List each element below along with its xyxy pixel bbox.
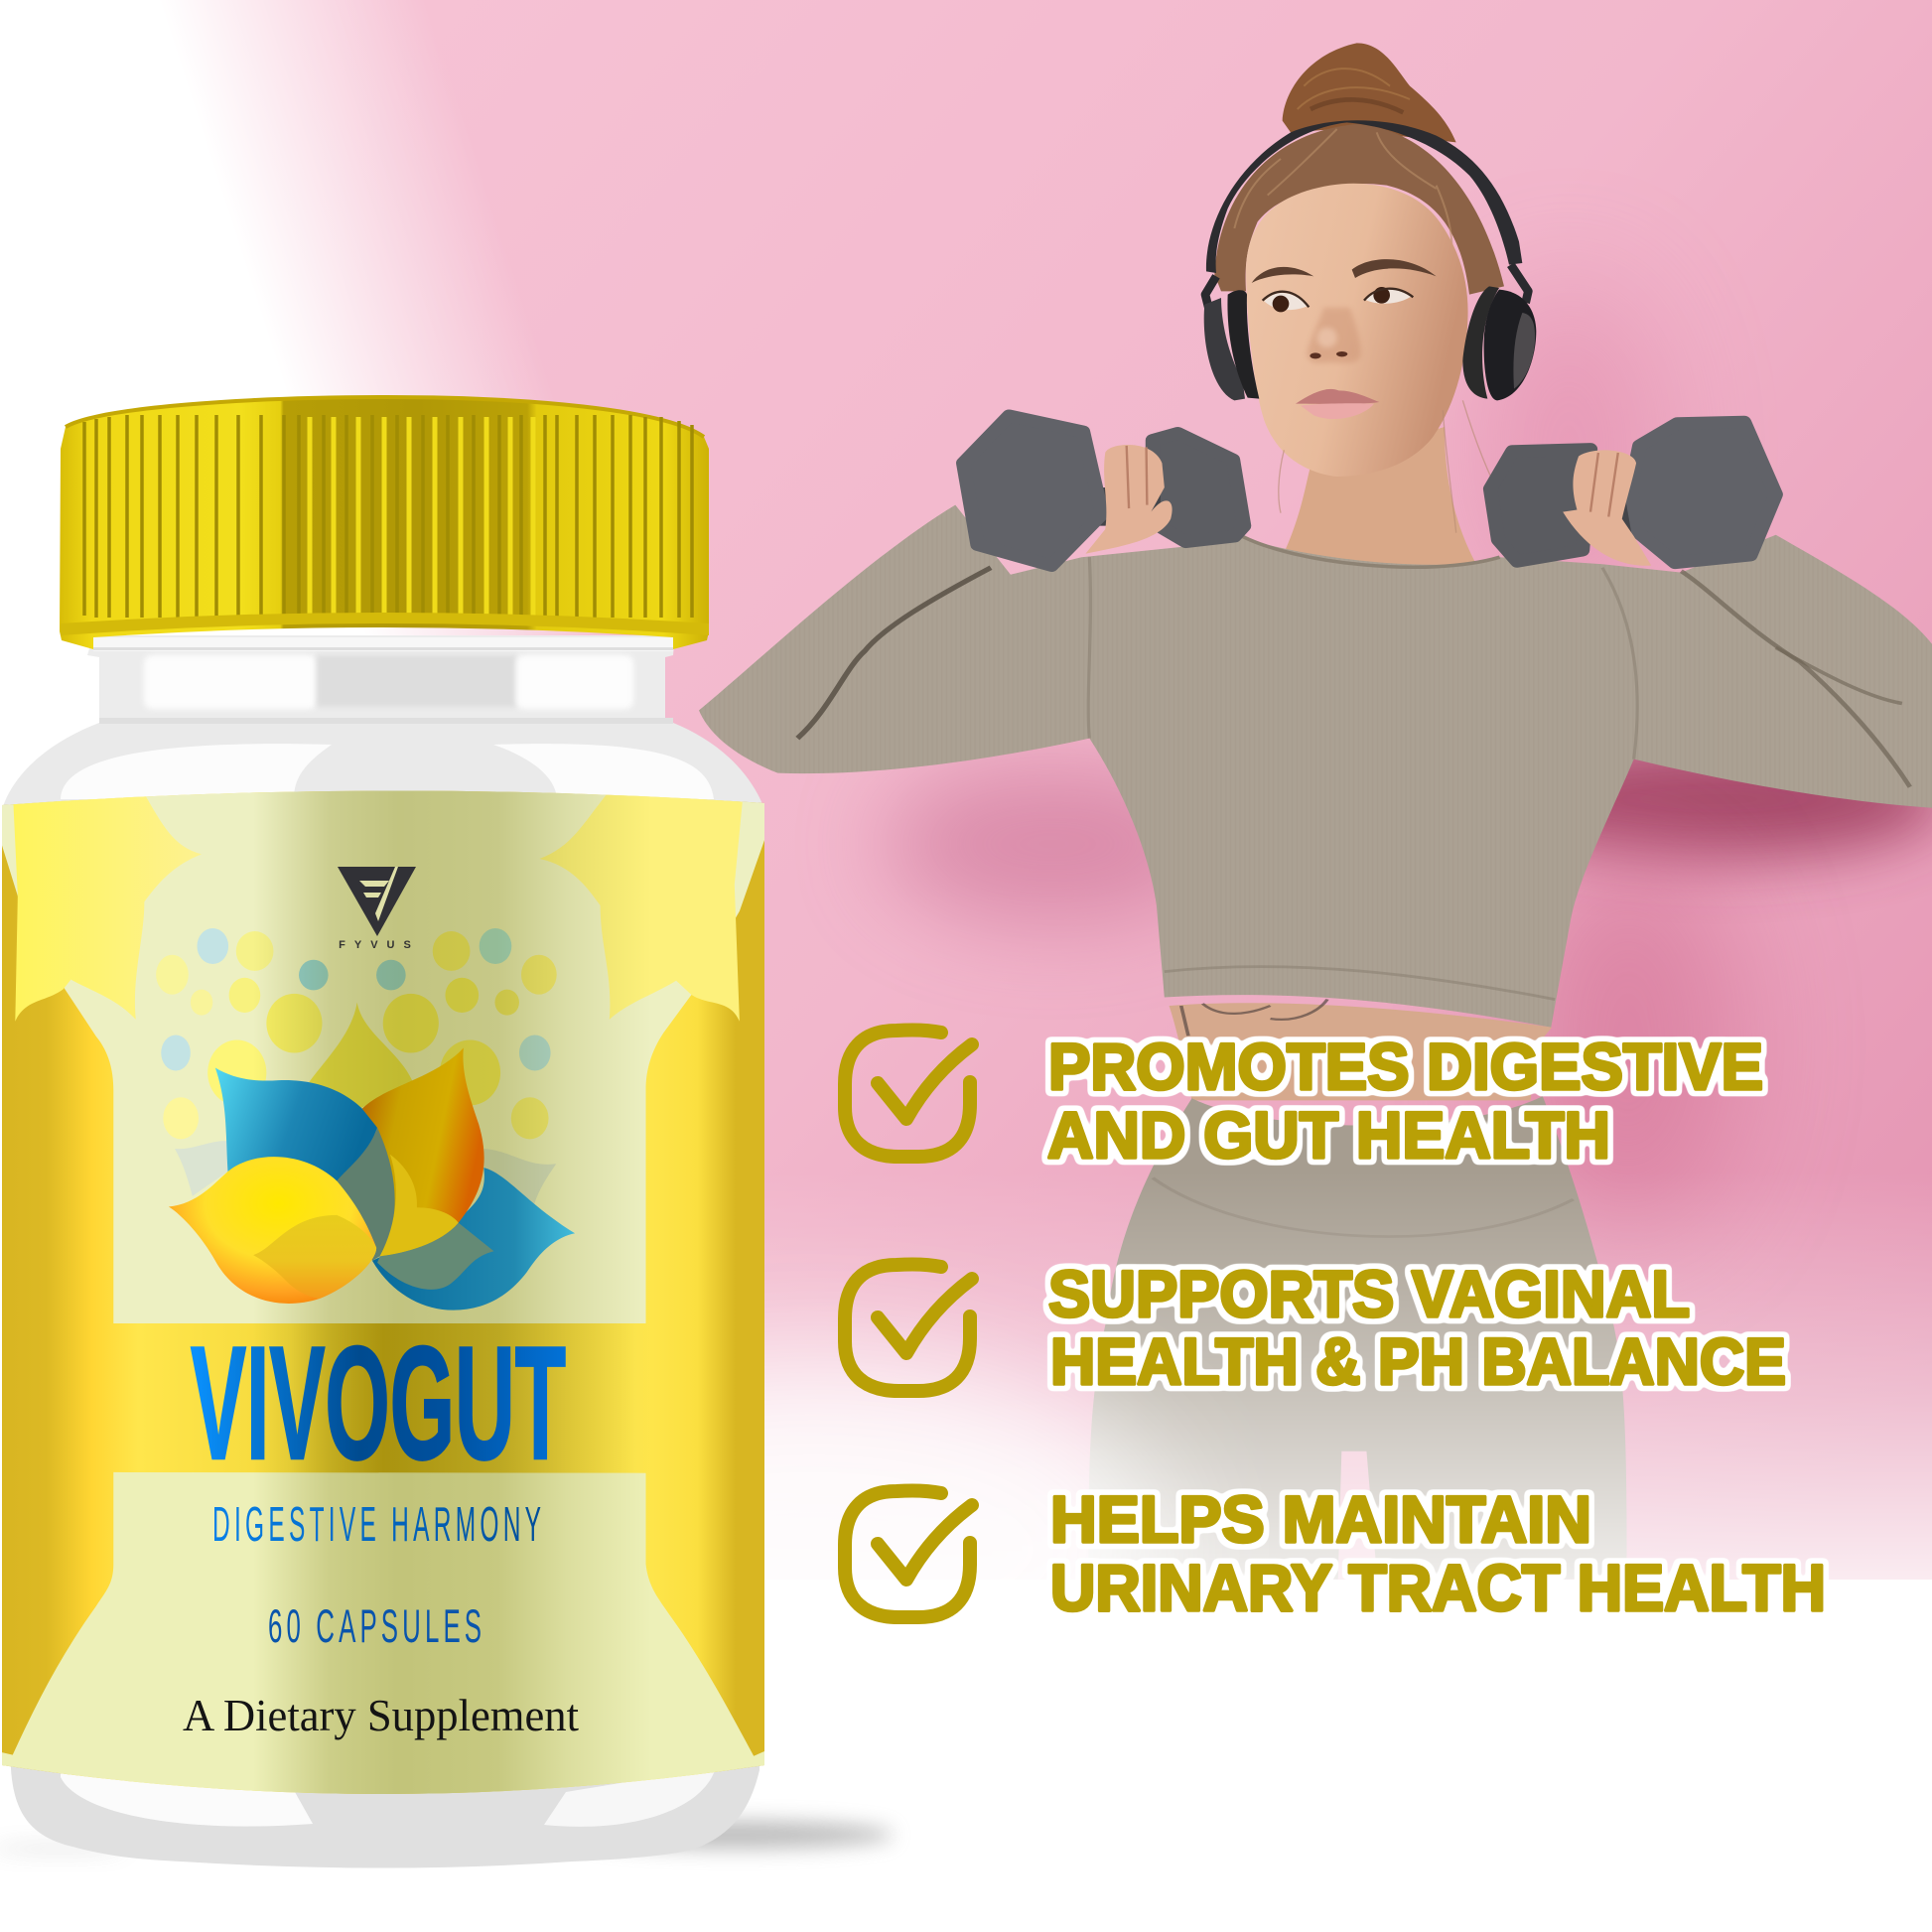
label shading band: [0, 764, 766, 1827]
hair front: [1214, 124, 1504, 295]
person lifting dumbbells: [699, 43, 1932, 1580]
right dumbbell: [1490, 422, 1776, 566]
face: [1246, 184, 1502, 533]
benefit text 1: [1047, 1030, 1763, 1172]
benefit text 2: [1048, 1257, 1786, 1398]
lower white fade: [0, 1172, 1932, 1580]
benefit 1: [845, 1030, 1763, 1172]
neck: [1286, 427, 1475, 565]
icon: check box 1: [845, 1030, 972, 1157]
bubbles: [156, 928, 557, 1139]
bottle cap: [60, 397, 709, 649]
hair bun: [1283, 43, 1456, 142]
subtitle: DIGESTIVE HARMONY: [212, 1498, 541, 1552]
bottle base: [11, 1757, 759, 1868]
benefit text 3: HELPS MAINTAIN: [1050, 1482, 1591, 1556]
bottle neck: [87, 635, 675, 730]
left white fade: [0, 0, 764, 1588]
left dumbbell: [963, 416, 1244, 566]
brand logo: [338, 867, 420, 951]
benefit 2: [845, 1257, 1786, 1398]
capsule count: 60 CAPSULES: [268, 1601, 482, 1653]
benefit text 3: URINARY TRACT HEALTH: [1050, 1551, 1826, 1624]
icon: check box 3: [845, 1490, 972, 1617]
label base: [0, 764, 766, 1827]
benefit text 1: PROMOTES DIGESTIVE: [1048, 1030, 1763, 1103]
torso and dumbbells: [699, 416, 1932, 1028]
benefit text 1: AND GUT HEALTH: [1047, 1098, 1610, 1172]
bottle shoulder: [2, 721, 764, 809]
head with headphones: [1204, 43, 1536, 586]
benefit text 2: SUPPORTS VAGINAL: [1048, 1257, 1690, 1330]
back lotus petals: [175, 1003, 556, 1203]
midriff and leggings: [1088, 1000, 1627, 1580]
shirt: [699, 505, 1932, 1028]
cap ribs: [84, 415, 692, 618]
brand logo: FYVUS: [339, 939, 420, 951]
benefit 3: [845, 1482, 1826, 1624]
product name: VIVOGUT: [191, 1313, 566, 1493]
product bottle: [0, 397, 894, 1868]
icon: check box 2: [845, 1264, 972, 1391]
benefit text 3: [1050, 1482, 1826, 1624]
headphones: [1204, 120, 1536, 400]
lotus logo: [169, 1048, 575, 1311]
pink backdrop with person: [196, 0, 1932, 1580]
benefit text 2: HEALTH & PH BALANCE: [1050, 1324, 1786, 1398]
dietary supplement line: A Dietary Supplement: [183, 1691, 579, 1740]
label artwork lower: [2, 1472, 764, 1823]
label artwork upper: [0, 785, 765, 1323]
ground shadow: [0, 1821, 894, 1855]
